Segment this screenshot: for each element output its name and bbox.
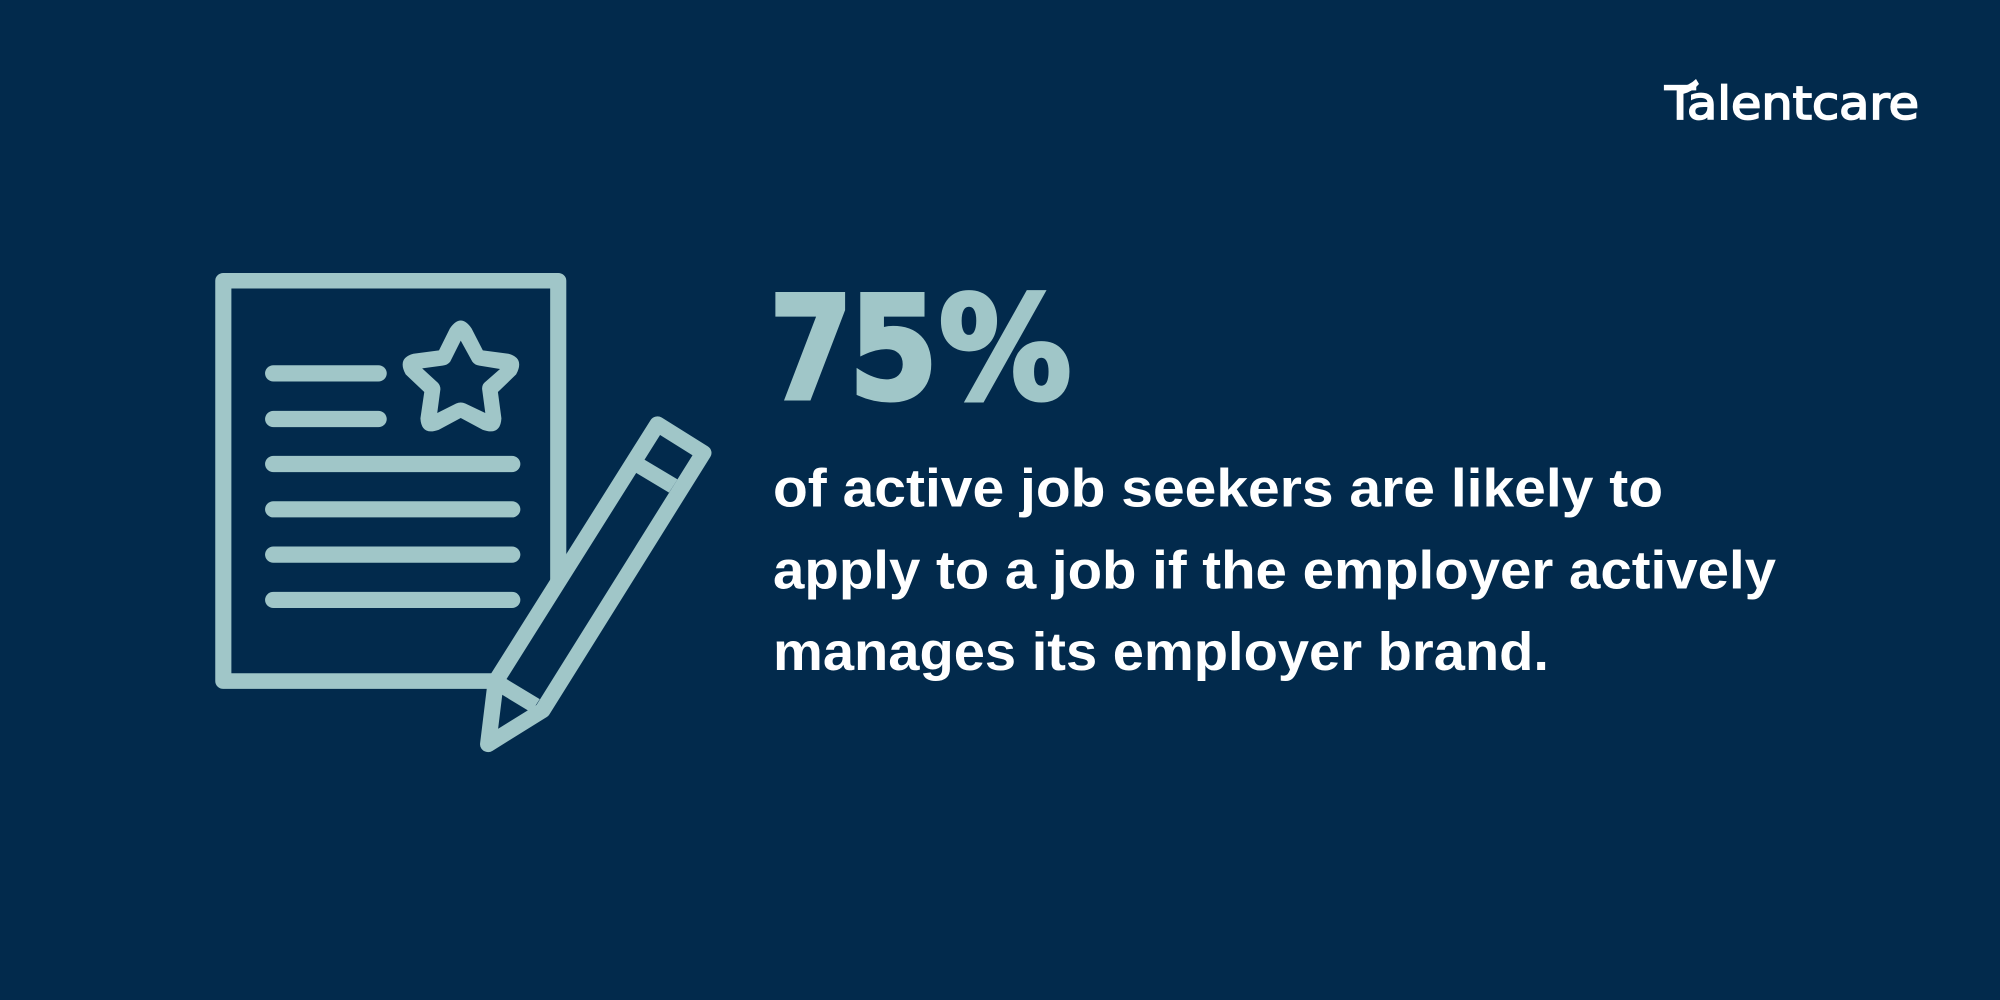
star [403,320,519,431]
statistic: 75%: 7 [770,266,853,432]
statistic: 75%: % [939,268,1071,432]
document outline [223,281,558,681]
logo: Talentcare: Talentcare [1664,77,1919,130]
text lines [273,373,512,600]
statistic: 75% [770,266,1071,432]
description text: of active job seekers are likely to [773,459,1663,519]
pencil band [640,466,673,486]
description text: apply to a job if the employer actively [773,540,1776,600]
description text: manages its employer brand. [773,622,1549,682]
pencil tip divider [499,683,535,706]
icon: resume document with star and pencil [223,281,703,744]
statistic: 75%: 5 [849,267,938,432]
pencil [488,424,703,744]
description text [773,459,1776,682]
